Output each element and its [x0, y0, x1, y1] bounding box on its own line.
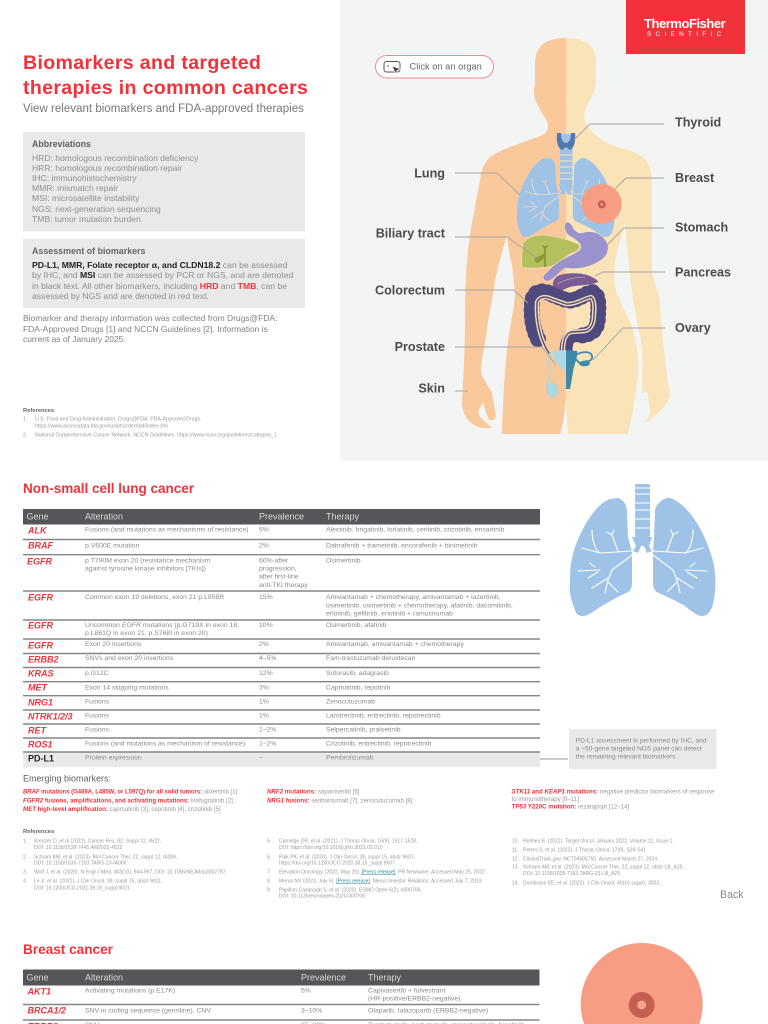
references: lung section: DOI: 10.1158/1535-7163.TARG-23-IA006: [34, 860, 127, 866]
references: lung section: 7.: [267, 869, 271, 875]
row: EGFR T790M: against tyrosine kinase inhibitors [TKIs]): [85, 566, 206, 572]
references: lung section: Holmes B. (2022). Target Oncol, January 2022, Volume 11, Issue 1.: [523, 838, 674, 844]
heading: non-small cell lung cancer: Non-small cell lung cancer: [23, 481, 195, 496]
row: RET: Selpercatinib, pralsetinib: [326, 727, 401, 734]
organ labels: Colorectum: [375, 284, 445, 298]
row: ERBB2: [28, 654, 416, 664]
text block: emerging biomarkers column 3: [512, 789, 715, 811]
references: lung section: 8.: [267, 878, 271, 884]
illustration: lungs: [570, 484, 715, 616]
row: NTRK1/2/3: NTRK1/2/3: [28, 711, 72, 721]
text block: sources note: [23, 313, 277, 344]
row: ALK: Alectinib, brigatinib, lorlatinib, ceritinib, crizotinib, ensartinib: [326, 526, 505, 534]
row: ERBB2: ERBB2: [28, 654, 59, 664]
text block: emerging biomarkers column 3: TP53 Y220C mutation: rezatapopt [12–14]: [512, 804, 629, 811]
panel: body map: [340, 0, 768, 461]
references: intro: U.S. Food and Drug Administration. Drugs@FDA: FDA-Approved Drugs.: [35, 416, 201, 422]
organ labels: Stomach: [675, 220, 728, 234]
references: lung section: 4.: [23, 878, 27, 884]
references: lung section: [23, 829, 684, 900]
organ: thyroid: [557, 133, 575, 150]
row: KRAS: KRAS: [28, 668, 54, 678]
references: lung section: Peters S, et al. (2022). J Thorac Oncol, 17(9), S39-S41: [523, 847, 646, 853]
panel: abbreviations: MMR: mismatch repair: [32, 183, 118, 193]
panel: abbreviations: TMB: tumor mutation burden: [32, 214, 141, 224]
row: NTRK1/2/3: Fusions: [85, 713, 110, 720]
row: BRCA1/2: 3–10%: [301, 1008, 322, 1014]
heading: emerging biomarkers: Emerging biomarkers:: [23, 774, 111, 784]
illustration: breast: [581, 943, 703, 1024]
body silhouette: left half: [462, 38, 566, 434]
row: NRG1: [28, 697, 375, 707]
text block: emerging biomarkers column 3: to immunotherapy [9–11]: [512, 796, 579, 803]
organ: pancreas: [553, 273, 598, 291]
references: intro: [23, 408, 277, 438]
row: ROS1: [28, 739, 432, 749]
row: EGFR uncommon: Uncommon EGFR mutations (p.G719X in exon 18,: [85, 622, 239, 629]
row: EGFR exon 20: [28, 640, 464, 650]
references: lung section: 6.: [267, 854, 271, 860]
row: ERBB2: Fam-trastuzumab deruxtecan: [326, 655, 416, 662]
row: BRCA1/2: SNV in coding sequence (germline), CNV: [85, 1008, 211, 1014]
text block: sources note: FDA-Approved Drugs [1] and NCCN Guidelines [2]. Information is: [23, 324, 268, 334]
row: ERBB2: [28, 1022, 524, 1024]
references: lung section: 11.: [512, 847, 519, 853]
callout: PD-L1 assessment: [540, 729, 716, 769]
row: EGFR uncommon: Osimertinib, afatinib: [326, 622, 387, 629]
row: BRCA1/2: [28, 1006, 488, 1016]
references: lung section: 1.: [23, 838, 27, 844]
row: EGFR exon 19: [28, 592, 513, 618]
references: lung section: DOI: 10.1200/JCO.2021.39.15_suppl.9021: [34, 885, 130, 891]
text block: emerging biomarkers column 3: STK11 and KEAP1 mutations: negative predictor biomarkers of response: [512, 789, 715, 796]
button: click on an organ: Click on an organ: [410, 62, 482, 72]
organ: trachea: [560, 134, 572, 191]
references: lung section: Le X, et al. (2021). J Clin Oncol, 39, suppl 15, abstr 9021,: [34, 878, 162, 884]
organ: uterus and ovary: [566, 350, 592, 389]
panel: abbreviations: MSI: microsatellite instability: [32, 193, 140, 203]
organ: breast: [582, 184, 622, 224]
row: EGFR T790M: 60% after: [259, 558, 289, 564]
references: lung section: Kreuzer D, et al (2022). Cancer Res, 82, Suppl 12, 4522,: [34, 838, 161, 844]
organ: stomach: [543, 222, 608, 281]
logo: Thermo Fisher Scientific: SCIENTIFIC: [647, 31, 726, 38]
panel: abbreviations: HRD: homologous recombination deficiency: [32, 153, 199, 163]
row: RET: RET: [28, 725, 48, 735]
row: NRG1: NRG1: [28, 697, 53, 707]
row: ROS1: Fusions (and mutations as mechanism of resistance): [85, 741, 245, 748]
row: EGFR exon 19: osimertinib, osimertinib + chemotherapy, afatinib, dacomitinib,: [326, 602, 513, 610]
row: RET: Fusions: [85, 727, 110, 734]
breast table header: Prevalence: [301, 972, 346, 982]
row: BRCA1/2: Olaparib, talazoparib (ERBB2-negative): [368, 1008, 488, 1014]
row: PD-L1 shading: [23, 752, 540, 767]
text block: emerging biomarkers column 1: MET high-level amplification: capmatinib [3], cepotinib [4], crizotinib [5]: [23, 806, 221, 813]
row: BRAF: BRAF: [28, 540, 53, 550]
breast table header: [23, 970, 540, 986]
row: BRAF: 2%: [259, 542, 269, 550]
row: EGFR exon 19: erlotinib, gefitinib, erlotinib + ramucirumab: [326, 611, 453, 618]
row: MET: Exon 14 skipping mutations: [85, 684, 169, 692]
references: intro: https://www.accessdata.fda.gov/scripts/cder/daf/index.cfm: [35, 424, 168, 430]
row: ERBB2: SNVs and exon 20 insertions: [85, 655, 174, 662]
references: lung section: ClinicalTrials.gov. NCT04585750. Accessed March 27, 2024.: [523, 856, 658, 862]
row: EGFR exon 19: Common exon 19 deletions, exon 21 p.L858R: [85, 594, 224, 601]
row: ALK: ALK: [27, 525, 48, 535]
text block: sources note: current as of January 2025.: [23, 334, 126, 344]
logo: Thermo Fisher Scientific: ThermoFisher: [644, 16, 726, 31]
back link: Back: [720, 889, 744, 901]
references: lung section: Dumbrava EE, et al. (2022). J Clin Oncol, 40(16 suppl), 3003.: [523, 880, 660, 886]
panel: abbreviations: IHC: immunohistochemistry: [32, 173, 137, 183]
row: EGFR exon 19: 15%: [259, 594, 273, 601]
text block: emerging biomarkers column 2: NRG1 fusions: seribantumab [7], zenocutuzumab [8]: [267, 798, 413, 805]
references: intro: 1.: [23, 416, 27, 422]
references: lung section: Papillon-Cavanagh S, et al. (2020). ESMO Open 5(2), e000706,: [279, 888, 422, 894]
references: lung section: 13.: [512, 864, 519, 870]
row: RET: 1–2%: [259, 727, 277, 734]
organ labels: [375, 116, 731, 396]
row: AKT1: [26, 986, 460, 1002]
organ labels: Prostate: [395, 340, 445, 354]
row: PD-L1: [28, 753, 374, 763]
references: lung section: DOI: 10.1136/esmoopen-2020-000706: [279, 894, 365, 900]
row: MET: MET: [28, 682, 48, 692]
references: lung section: 5.: [267, 838, 271, 844]
row: EGFR exon 19: EGFR: [28, 592, 54, 602]
references: intro: National Comprehensive Cancer Network. NCCN Guidelines. https://www.nccn.org/guidelines/category_1: [35, 432, 277, 438]
text block: emerging biomarkers column 2: [267, 789, 413, 805]
organ labels: Pancreas: [675, 266, 731, 280]
row: BRCA1/2: BRCA1/2: [28, 1006, 66, 1016]
text block: sources note: Biomarker and therapy information was collected from Drugs@FDA:: [23, 313, 277, 323]
row: MET: 3%: [259, 684, 269, 692]
panel: abbreviations: Abbreviations: [32, 139, 91, 149]
table header: Therapy: [326, 512, 360, 522]
row: EGFR T790M: Osimertinib: [326, 558, 361, 564]
row: PD-L1: Pembrolizumab: [326, 755, 374, 762]
references: lung section: 3.: [23, 869, 27, 875]
references: intro: References: [23, 408, 54, 414]
table: breast cancer: [23, 970, 540, 1024]
row: BRAF: p.V600E mutation: [85, 542, 140, 550]
organ: colorectum: [532, 292, 598, 353]
panel: assessment of biomarkers: [23, 239, 305, 308]
row: PD-L1: PD-L1: [28, 753, 54, 763]
references: lung section: Paik PK, et al. (2020). J Clin Oncol, 38, suppl 15, abstr 9607,: [279, 854, 415, 860]
organ labels: Breast: [675, 171, 715, 185]
references: lung section: Schram AM, et al. (2023). Mol Cancer Ther, 22, suppl 12, IA006,: [34, 854, 178, 860]
panel: assessment of biomarkers: Assessment of biomarkers: [32, 246, 146, 256]
organ: liver and biliary tract: [522, 235, 580, 268]
references: lung section: 10.: [512, 838, 519, 844]
organ labels: Skin: [418, 382, 445, 396]
references: lung section: 2.: [23, 854, 27, 860]
row: EGFR T790M: anti-TKI therapy: [259, 582, 308, 589]
row: EGFR T790M: after first-line: [259, 574, 299, 581]
panel: abbreviations: NGS: next-generation sequencing: [32, 204, 161, 214]
row: ALK: 5%: [259, 526, 269, 534]
row: EGFR uncommon: [28, 620, 387, 637]
row: AKT1: AKT1: [26, 986, 51, 996]
table: non-small cell lung cancer: [23, 509, 540, 767]
row: EGFR uncommon: 10%: [259, 622, 273, 629]
row: NTRK1/2/3: Larotrectinib, entrectinib, repotrectinib: [326, 713, 441, 720]
callout: PD-L1 assessment: PD-L1 assessment is performed by IHC, and: [576, 737, 707, 744]
table header: Alteration: [85, 512, 123, 522]
organ labels: Thyroid: [675, 116, 721, 130]
row: EGFR exon 20: EGFR: [28, 640, 54, 650]
row: AKT1: Activating mutations (p.E17K): [85, 988, 175, 994]
references: lung section: 9.: [267, 888, 271, 894]
references: intro: 2.: [23, 432, 27, 438]
row: KRAS: Sotorasib, adagrasib: [326, 670, 389, 677]
leader lines: [455, 124, 665, 391]
panel: abbreviations: HRR: homologous recombination repair: [32, 163, 182, 173]
button: click on an organ: [376, 56, 494, 78]
organ labels: Lung: [414, 166, 445, 180]
references: lung section: Schram AM, et al. (2023). Mol Cancer Ther, 22, suppl 12, abstr LB_A25,: [523, 864, 684, 870]
row: NTRK1/2/3: 1%: [259, 713, 269, 720]
row: AKT1: Capivasertib + fulvestrant: [368, 988, 446, 994]
references: lung section: DOI: 10.1158/1538-7445.AM2022-4522: [34, 845, 122, 851]
panel: assessment of biomarkers: assessed by NGS and are denoted in red text.: [32, 291, 209, 301]
row: KRAS: p.G12C: [85, 670, 109, 677]
references: lung section: Wolf J, et al. (2020). N Engl J Med, 383(10), 944-957, DOI: 10.1056/NEJMoa2002787: [34, 869, 226, 875]
row: NRG1: Zenocutuzumab: [326, 698, 375, 706]
body silhouette: right half: [566, 38, 670, 434]
row: EGFR exon 20: Exon 20 insertions: [85, 641, 142, 648]
breast table header: Alteration: [85, 972, 123, 982]
text block: emerging biomarkers column 2: NRF2 mutations: sapanisertib [6]: [267, 789, 360, 796]
breast table header: Therapy: [368, 972, 402, 982]
row: EGFR exon 20: 2%: [259, 641, 269, 648]
references: lung section: Merus NV (2023, July 5). [Press release]. Merus Investor Relations. Accessed July 7, 2023.: [279, 878, 483, 884]
row: ROS1: Crizotinib, entrectinib, repotrectinib: [326, 741, 432, 748]
row: EGFR uncommon: p.L861Q in exon 21, p.S768I in exon 20): [85, 630, 208, 637]
references: lung section: References: [23, 829, 54, 835]
row: NRG1: Fusions: [85, 698, 110, 706]
row: PD-L1: Protein expression: [85, 755, 142, 762]
text block: emerging biomarkers column 1: [23, 790, 237, 813]
references: lung section: 12.: [512, 856, 519, 862]
callout: PD-L1 assessment: a ~50-gene targeted NGS panel can detect: [576, 745, 702, 752]
row: BRAF: [28, 540, 478, 550]
references: lung section: Camidge DR, et al. (2021). J Thorac Oncol, 16(9), 1517-1528,: [279, 838, 418, 844]
row: RET: [28, 725, 401, 735]
row: NRG1: 1%: [259, 698, 269, 706]
row: EGFR T790M: EGFR: [27, 556, 53, 566]
row: ALK: [27, 525, 505, 535]
text block: emerging biomarkers column 1: BRAF mutations (G469A, L485W, or L597Q) for all solid tumors: ulixertinib [1]: [23, 790, 237, 796]
row: KRAS: [28, 668, 389, 678]
organ labels: Biliary tract: [376, 226, 446, 240]
references: lung section: DOI: https://doi.org/10.1016/j.jtho.2021.02.010: [279, 845, 383, 851]
row: ERBB2: 4–5%: [259, 655, 277, 662]
row: MET: Capmatinib, tepotinib: [326, 684, 390, 692]
row: EGFR T790M: progression,: [259, 566, 297, 572]
table header: Gene: [26, 512, 49, 522]
row: EGFR exon 20: Amivantamab, amivantamab + chemotherapy: [326, 641, 464, 648]
organ: prostate: [546, 350, 566, 397]
panel: abbreviations: [23, 132, 305, 232]
panel: assessment of biomarkers: PD-L1, MMR, Folate receptor α, and CLDN18.2 can be assessed: [32, 260, 288, 270]
breast table header: Gene: [26, 972, 49, 982]
references: lung section: https://doi.org/10.1200/JCO.2020.38.15_suppl.9607: [279, 860, 395, 866]
row: EGFR uncommon: EGFR: [28, 620, 54, 630]
row: BRAF: Dabrafenib + trametinib, encorafenib + binimetinib: [326, 542, 478, 550]
row: EGFR T790M: p.T790M exon 20 (resistance mechanism: [85, 558, 211, 564]
panel: assessment of biomarkers: in black text. All other biomarkers, including HRD and TMB, can be: [32, 281, 287, 291]
row: ALK: Fusions (and mutations as mechanisms of resistance): [85, 526, 249, 534]
row: ROS1: 1–2%: [259, 741, 277, 748]
organ: lung: [517, 158, 615, 237]
subtitle: View relevant biomarkers and FDA-approved therapies: [23, 103, 304, 115]
row: PD-L1: –: [259, 755, 263, 762]
row: ROS1: ROS1: [28, 739, 53, 749]
references: lung section: Elevation Oncology. (2022, May 25). [Press release]. PR Newswire. Accessed May 25, 2022.: [279, 869, 486, 875]
row: AKT1: 5%: [301, 988, 311, 994]
row: AKT1: (HR-positive/ERBB2-negative): [368, 996, 460, 1002]
references: lung section: DOI: 10.1158/1535-7163.TARG-23-LB_A25: [523, 871, 620, 877]
title: Biomarkers and targeted: [23, 52, 261, 74]
title: therapies in common cancers: [23, 77, 308, 99]
callout: PD-L1 assessment: the remaining relevant biomarkers: [576, 754, 676, 760]
row: EGFR T790M: [27, 556, 361, 589]
text block: emerging biomarkers column 1: FGFR2 fusions, amplifications, and activating mutations: lirafugratinib [2]: [23, 798, 233, 805]
title: [23, 52, 308, 99]
organ labels: Ovary: [675, 321, 711, 335]
table header: [23, 509, 540, 524]
row: EGFR exon 19: Amivantamab + chemotherapy, amivantamab + lazertinib,: [326, 594, 501, 601]
references: lung section: 14.: [512, 880, 519, 886]
table header: Prevalence: [259, 512, 304, 522]
row: MET: [28, 682, 390, 692]
row: NTRK1/2/3: [28, 711, 441, 721]
row: KRAS: 12%: [259, 670, 273, 677]
heading: breast cancer: Breast cancer: [23, 942, 114, 957]
panel: assessment of biomarkers: by IHC, and MSI can be assessed by PCR or NGS, and are denoted: [32, 270, 294, 280]
logo: Thermo Fisher Scientific: [626, 0, 745, 54]
